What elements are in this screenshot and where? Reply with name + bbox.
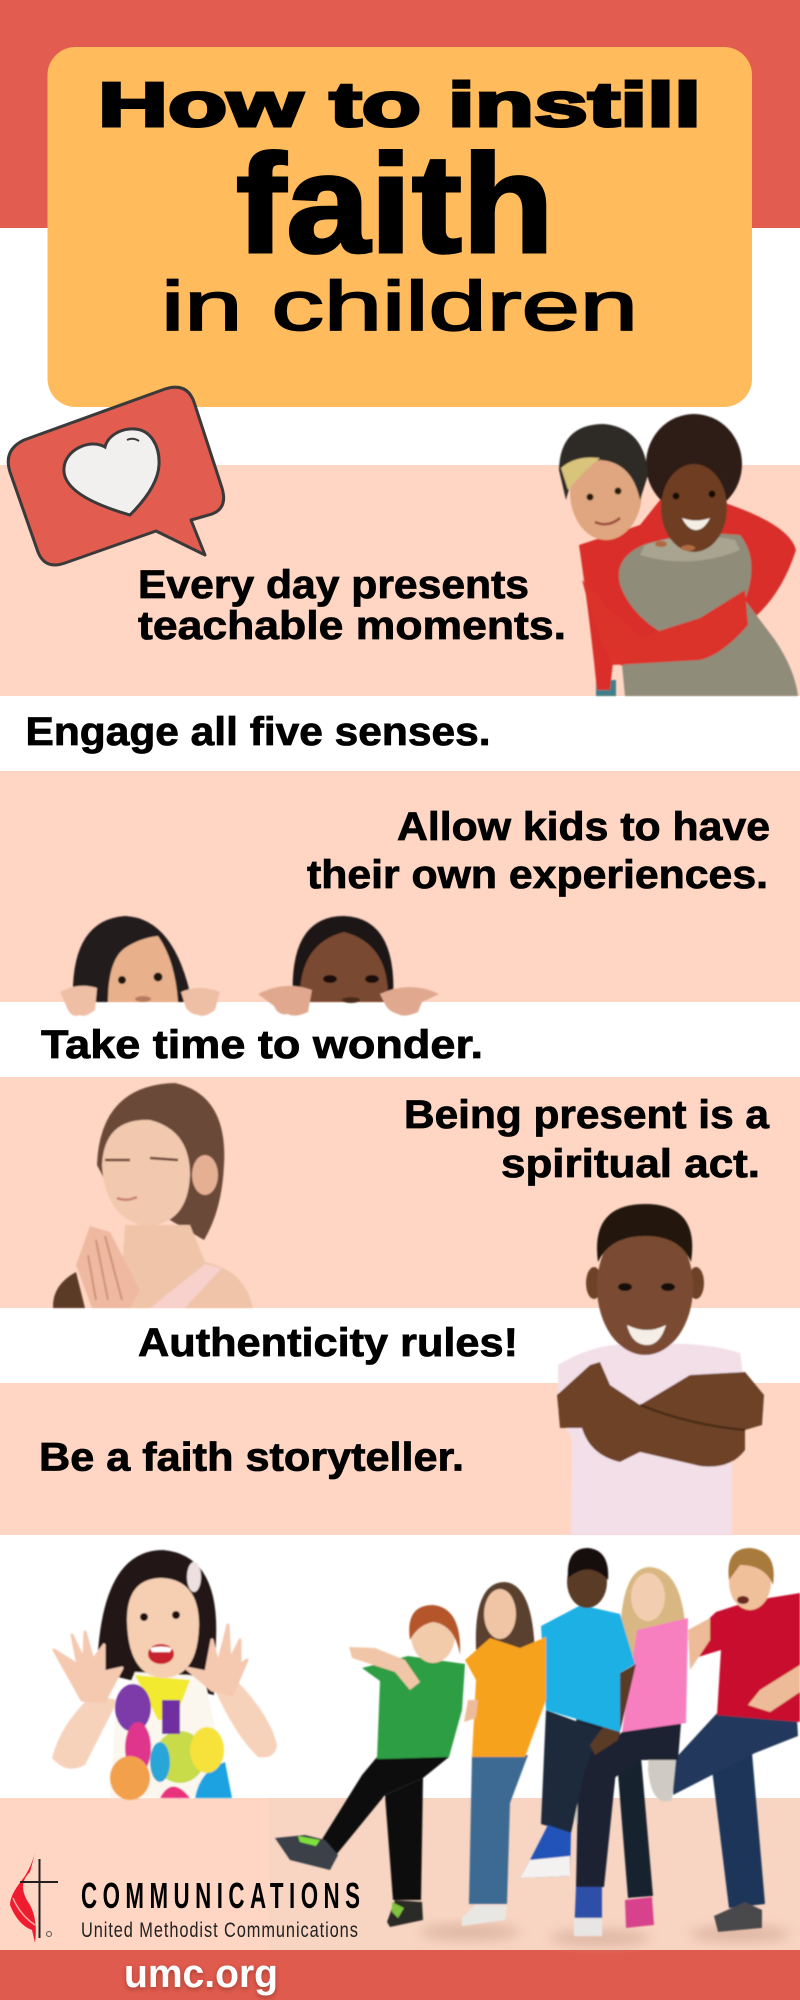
title panel: [48, 47, 752, 407]
logo text: [81, 1877, 360, 1941]
icon: speech bubble with heart: [8, 387, 224, 565]
kid: orange shirt: [462, 1582, 546, 1926]
photo: two children peeking over a wall: [60, 916, 439, 1016]
text: Every day presents teachable moments: [138, 563, 566, 648]
ground shadows: [420, 1924, 790, 1946]
logo: cross and flame: [10, 1853, 58, 1943]
photo: excited little girl: [52, 1550, 277, 1800]
footer url: umc.org: [124, 1952, 278, 1996]
logo text: United Methodist Communications: [81, 1918, 358, 1941]
kid: green shirt: [275, 1605, 465, 1927]
logo text: COMMUNICATIONS: [81, 1877, 360, 1916]
text: Being present is a spiritual act: [404, 1093, 770, 1186]
text: Being present is a spiritual act: spiritual act.: [501, 1142, 760, 1186]
text: Engage all five senses: Engage all five senses.: [26, 710, 490, 754]
text: Be a faith storyteller: Be a faith storyteller.: [39, 1436, 464, 1480]
title line: faith: faith: [236, 125, 554, 282]
kid: blue shirt: [520, 1548, 636, 1936]
text: Every day presents teachable moments: teachable moments.: [138, 604, 566, 648]
photo: girl praying: [53, 1083, 253, 1308]
photo: smiling boy with crossed arms: [557, 1204, 764, 1535]
photo: group of five dancing kids: [275, 1548, 800, 1946]
kid: pink shirt: [572, 1567, 710, 1928]
text: Take time to wonder: Take time to wonder.: [41, 1023, 483, 1067]
photo: two children hugging: [559, 414, 798, 696]
title line: How to instill: How to instill: [98, 71, 701, 140]
text: Authenticity rules: Authenticity rules!: [138, 1321, 518, 1365]
text: Every day presents teachable moments: Every day presents: [138, 563, 529, 607]
kid: red shirt: [648, 1548, 800, 1932]
text: Being present is a spiritual act: Being present is a: [404, 1093, 770, 1137]
title line: in children: in children: [161, 267, 638, 345]
text: Allow kids to have their own experiences: their own experiences.: [307, 853, 768, 897]
text: Allow kids to have their own experiences: [307, 805, 770, 897]
text: Allow kids to have their own experiences: Allow kids to have: [397, 805, 770, 849]
